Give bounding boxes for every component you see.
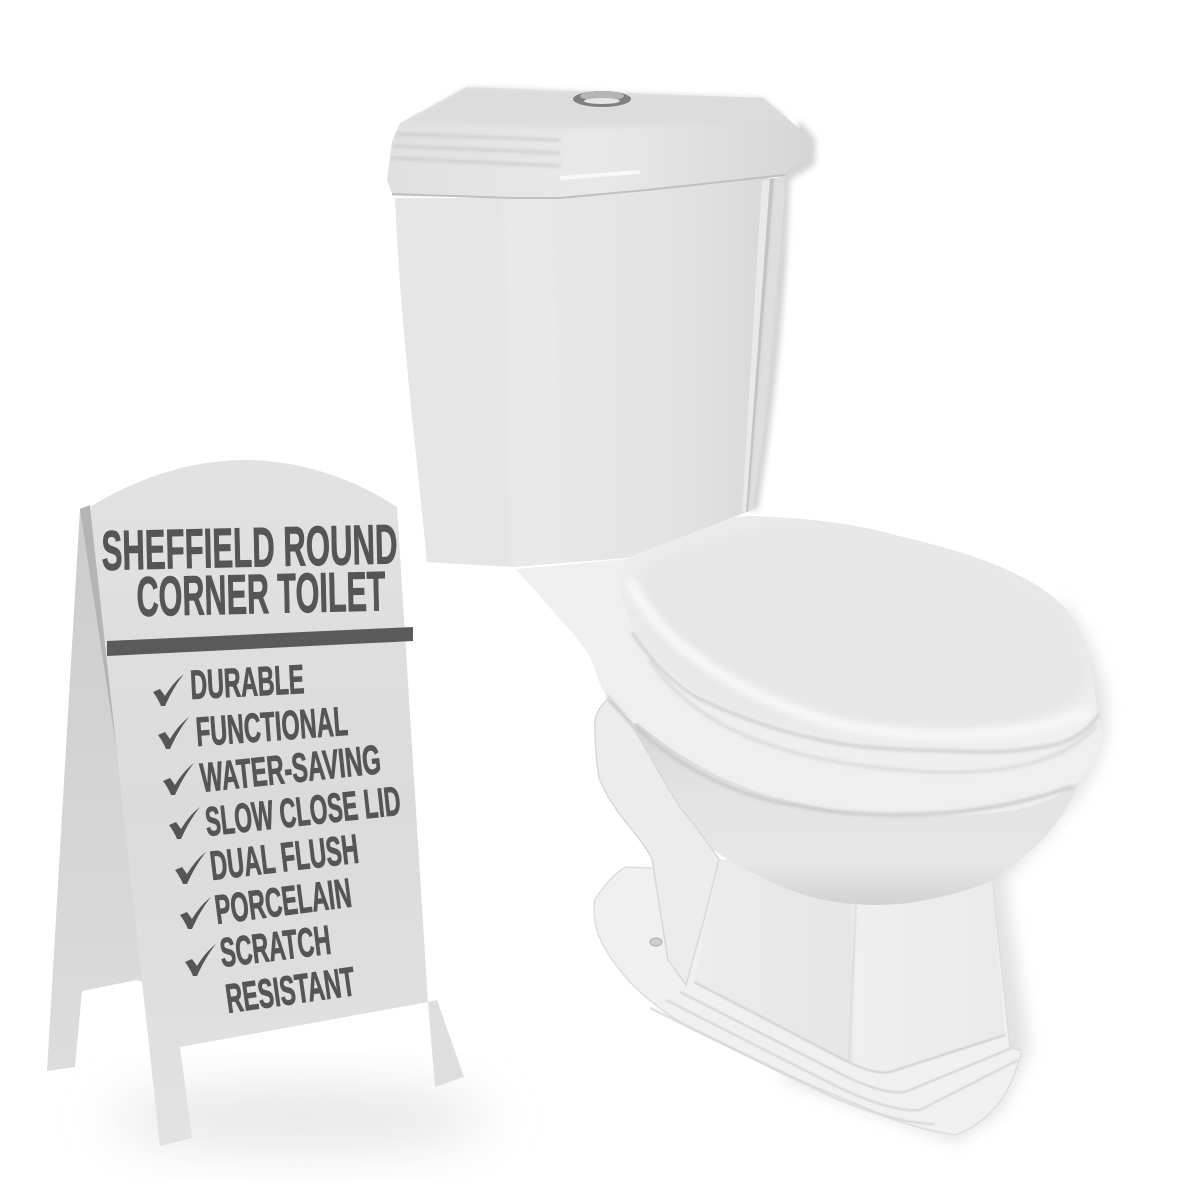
lid top face xyxy=(408,87,790,128)
A-frame sign xyxy=(47,460,464,1146)
toilet xyxy=(387,87,1102,1135)
item: slow close lid: SLOW CLOSE LID xyxy=(203,778,403,845)
tank right pilaster xyxy=(742,180,770,512)
lid ridges xyxy=(391,134,560,166)
sign front panel xyxy=(90,460,428,1146)
rim shadow xyxy=(607,696,1073,815)
cistern tank xyxy=(395,177,786,570)
item: dual flush: DUAL FLUSH xyxy=(208,826,361,889)
sign right leg xyxy=(428,1000,464,1087)
item: durable: DURABLE xyxy=(189,656,305,708)
divider bar xyxy=(107,627,413,656)
item: slow close lid xyxy=(169,778,403,845)
sign back panel xyxy=(47,509,190,1071)
item: functional: FUNCTIONAL xyxy=(194,698,349,755)
sign title: CORNER TOILET xyxy=(136,559,386,628)
soft shadow: bowl and base xyxy=(780,600,1107,1142)
item: scratch resistant: SCRATCH xyxy=(217,917,333,976)
pedestal panel edge xyxy=(849,900,856,1062)
cistern lid xyxy=(387,87,808,198)
item: dual flush xyxy=(175,826,361,889)
mounting hole xyxy=(650,938,662,946)
lid highlight xyxy=(560,172,640,178)
lid lower shadow xyxy=(392,175,785,198)
item: porcelain: PORCELAIN xyxy=(212,870,354,933)
flush button xyxy=(573,91,631,107)
floor shadow: sign xyxy=(110,1086,490,1150)
checklist xyxy=(153,656,403,1022)
tank corner panel xyxy=(503,190,560,570)
trapway tube xyxy=(595,700,719,985)
lid dome shading xyxy=(640,536,1085,726)
pedestal body xyxy=(694,859,1005,1072)
toilet lid xyxy=(628,516,1097,722)
item: water-saving xyxy=(163,736,383,801)
base plinth xyxy=(594,867,1022,1135)
sign side edge xyxy=(80,505,118,760)
bowl xyxy=(634,700,1085,905)
sign title: SHEFFIELD ROUND xyxy=(101,512,398,582)
item: water-saving: WATER-SAVING xyxy=(198,736,383,801)
item: scratch resistant xyxy=(185,917,358,1022)
pedestal and base xyxy=(594,859,1022,1135)
item: durable xyxy=(153,656,305,708)
shadow under toilet lid xyxy=(632,632,1099,752)
item: scratch resistant: RESISTANT xyxy=(223,958,358,1022)
soft shadow: cistern xyxy=(745,120,816,510)
rim crease xyxy=(650,660,1097,772)
seat rim xyxy=(516,559,1102,816)
sign title xyxy=(101,512,398,628)
item: porcelain xyxy=(180,870,354,933)
lid edge highlight xyxy=(630,580,1090,735)
item: functional xyxy=(158,698,349,755)
base step lines xyxy=(650,982,1018,1124)
